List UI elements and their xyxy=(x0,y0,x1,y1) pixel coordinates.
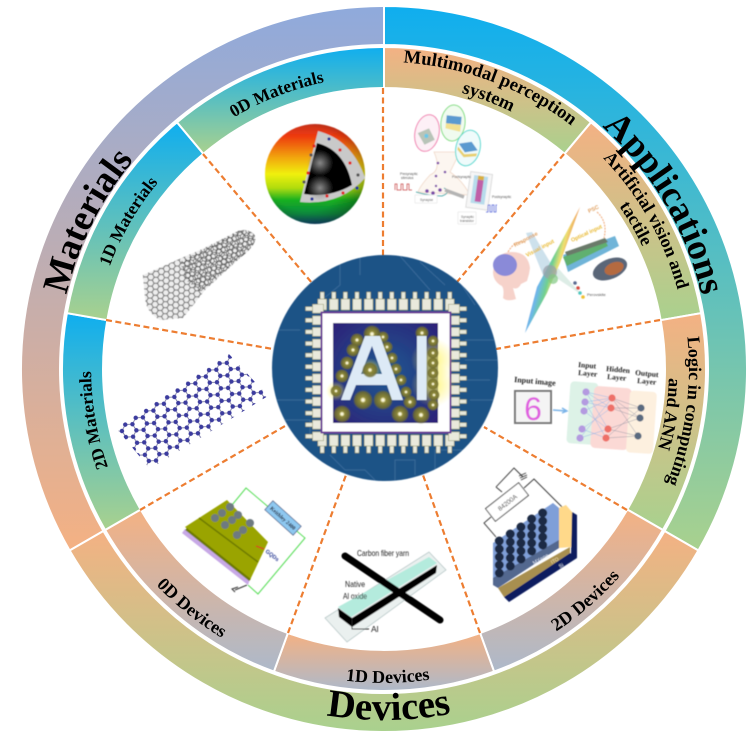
label: 2D Devices: 2D Devices xyxy=(550,572,619,632)
text: Carbon fiber yarn: Carbon fiber yarn xyxy=(357,548,409,558)
nanowire roll xyxy=(590,253,630,285)
postsynaptic spikes xyxy=(486,205,497,212)
label: 1D Materials: 1D Materials xyxy=(100,178,157,266)
teal oxide bar xyxy=(338,557,437,617)
caption: Visual input: Visual input xyxy=(525,239,556,259)
label: 1D Devices: 1D Devices xyxy=(347,669,430,684)
synaptic device slab xyxy=(563,236,619,272)
input digit frame xyxy=(515,391,551,427)
blue arrow xyxy=(553,408,567,413)
red arrow xyxy=(256,546,264,549)
layer titles: Layer xyxy=(578,368,598,379)
caption: PSC: PSC xyxy=(587,205,600,215)
small captions xyxy=(400,172,512,224)
small captions: transistor xyxy=(460,219,475,223)
layer titles: Input xyxy=(578,360,597,371)
small captions: Presynaptic xyxy=(400,172,418,176)
green ellipse xyxy=(439,104,467,142)
device block xyxy=(182,529,250,585)
head xyxy=(493,252,530,300)
small captions: Postsynaptic xyxy=(492,195,512,199)
Keithley meter: Keithley 2400 xyxy=(268,506,296,532)
label: Logic in computing and ANN: and ANN xyxy=(658,378,680,452)
layer titles: Hidden xyxy=(606,364,631,375)
layer labels: MXene xyxy=(532,553,550,567)
chip die xyxy=(322,312,450,432)
brain xyxy=(493,254,517,276)
illustration: multimodal perception xyxy=(395,104,512,224)
illustration: 0D device xyxy=(182,488,305,594)
inner segment: 2D Devices xyxy=(480,510,663,672)
layers xyxy=(493,503,559,585)
grey connector arrow xyxy=(445,190,464,197)
layer titles: Output xyxy=(635,368,659,379)
Al pointer line xyxy=(352,618,369,629)
substrate plate xyxy=(325,552,446,642)
layer labels: Si xyxy=(558,562,565,570)
presynaptic spikes xyxy=(395,184,412,190)
neurotransmitters xyxy=(425,162,446,195)
carbon fiber yarn xyxy=(345,556,440,620)
inner segment: Logic in computing and ANN xyxy=(627,313,706,530)
illustration: neural network xyxy=(514,360,659,454)
small captions: Synaptic xyxy=(461,215,474,219)
illustration: 1D device xyxy=(325,548,446,642)
neuron xyxy=(418,152,470,195)
inner segment: 0D Devices xyxy=(105,510,288,672)
layer labels: ITO xyxy=(550,556,560,566)
label: 0D Devices: 0D Devices xyxy=(158,578,226,637)
caption: Response: Response xyxy=(513,231,539,249)
illustration: 0D quantum dot sphere xyxy=(265,124,365,224)
text: Al oxide: Al oxide xyxy=(343,591,367,601)
response arrow xyxy=(508,242,524,252)
electrodes xyxy=(211,503,254,539)
text: Native: Native xyxy=(345,579,365,589)
foreground glow dots xyxy=(362,335,440,411)
layer panels xyxy=(566,381,657,454)
layer titles: Layer xyxy=(637,376,657,387)
layer titles: Layer xyxy=(607,372,627,383)
device column xyxy=(466,172,493,210)
label: 0D Materials: 0D Materials xyxy=(230,72,324,116)
illustration: 2D device xyxy=(484,468,577,602)
heading: Applications: Applications xyxy=(602,116,718,294)
chip background disc xyxy=(272,255,498,481)
text: Input image: Input image xyxy=(514,375,556,388)
label: Logic in computing and ANN: Logic in computing xyxy=(664,336,702,486)
input digit frame: 6 xyxy=(524,391,542,427)
legend: Perovskite xyxy=(587,292,606,297)
label: Multimodal perception system: system xyxy=(462,85,514,112)
inner segment: 2D Materials xyxy=(62,313,141,530)
label: Artificial vision and tactile: Artificial vision and xyxy=(603,154,690,290)
label: Multimodal perception system: Multimodal perception xyxy=(404,50,575,126)
outer ring: Devices xyxy=(70,531,698,732)
optical beam to legend xyxy=(552,268,582,295)
layer titles xyxy=(578,360,659,387)
heading: Materials: Materials xyxy=(43,151,132,294)
pin rows xyxy=(306,292,466,453)
die panel xyxy=(333,323,438,423)
label: Artificial vision and tactile: tactile xyxy=(620,202,650,246)
inner segment: Artificial vision and tactile xyxy=(565,122,701,320)
outer ring: Materials xyxy=(21,6,384,550)
circuit wires xyxy=(232,488,305,594)
inner segment: 0D Materials xyxy=(177,47,384,154)
layer labels xyxy=(532,553,565,570)
cyan ellipse xyxy=(452,128,484,168)
connections xyxy=(580,392,641,438)
visual cone xyxy=(526,232,556,285)
heading: Devices: Devices xyxy=(326,690,450,720)
small captions: Synapse xyxy=(420,198,433,202)
inner segment: 1D Devices xyxy=(274,633,494,691)
dashed spokes xyxy=(106,88,660,633)
inner segment: 1D Materials xyxy=(67,122,203,320)
illustration: 2D graphene sheet xyxy=(118,354,266,466)
rainbow band xyxy=(525,207,580,333)
faint circuit traces xyxy=(272,256,498,480)
text: Al: Al xyxy=(371,624,379,634)
glowing dots xyxy=(326,325,455,424)
GQDs label: GQDs xyxy=(264,549,280,563)
small captions: Postsynaptic xyxy=(452,175,472,179)
illustration: 1D carbon nanotube xyxy=(142,229,256,320)
PSC arc xyxy=(597,212,605,238)
84200A box: 84200A xyxy=(497,493,519,513)
nodes xyxy=(576,388,645,442)
illustration: artificial vision xyxy=(493,205,630,333)
wires xyxy=(484,468,563,537)
outer ring: Applications xyxy=(384,6,747,550)
surface ligands xyxy=(302,137,360,201)
pink ellipse xyxy=(411,112,443,154)
caption: Optical input: Optical input xyxy=(570,224,603,244)
cutaway wedge xyxy=(300,131,365,202)
crystal blob xyxy=(543,265,557,279)
letters AI xyxy=(341,336,426,400)
ground arrow xyxy=(232,585,247,592)
small captions: stimulus xyxy=(401,176,414,180)
black side of bar xyxy=(338,565,437,627)
ground xyxy=(519,473,527,480)
label: 2D Materials: 2D Materials xyxy=(79,372,108,470)
electrode array xyxy=(499,513,543,578)
inner segment: Multimodal perception system xyxy=(384,47,591,154)
center AI chip xyxy=(272,255,498,481)
